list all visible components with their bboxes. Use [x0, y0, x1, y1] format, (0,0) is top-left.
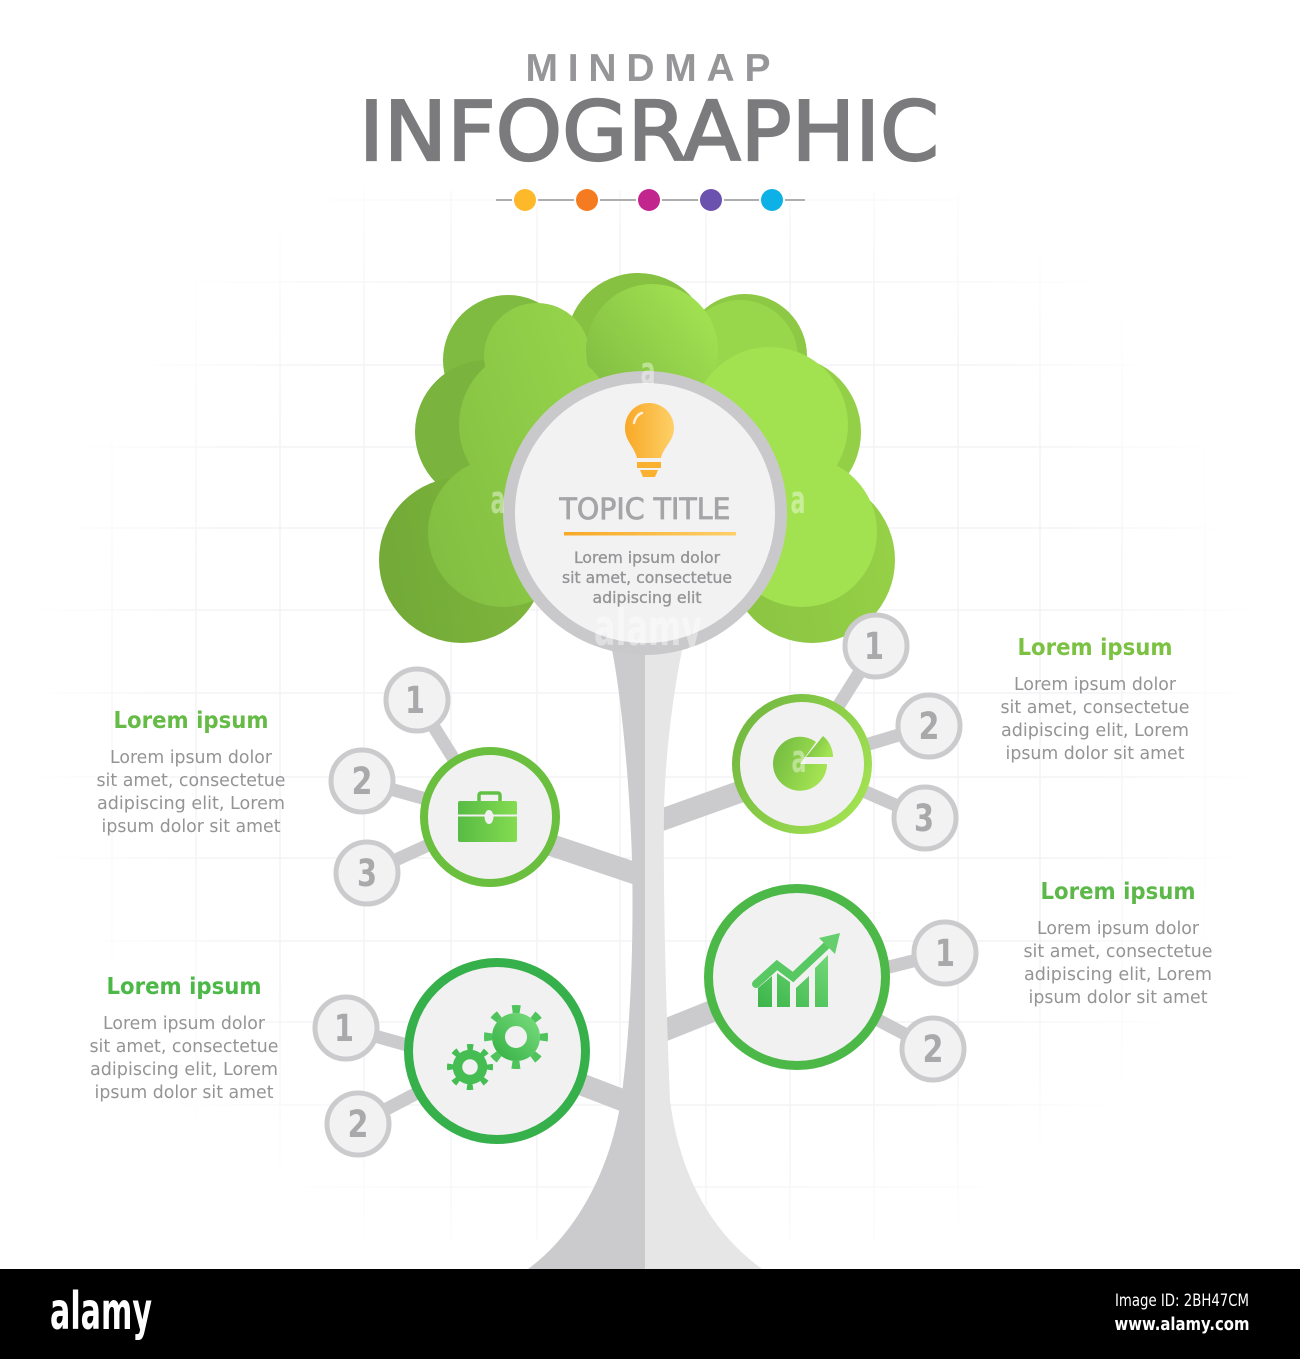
number 1 — [914, 922, 976, 984]
watermarks: a — [792, 737, 806, 781]
number 3: 3 — [914, 797, 934, 840]
number 1: 1 — [935, 932, 955, 975]
number 1: 1 — [864, 625, 884, 668]
topic description — [562, 548, 732, 607]
number 1 — [315, 997, 377, 1059]
watermarks: a — [790, 478, 806, 522]
watermarks: a — [640, 349, 656, 393]
icon: briefcase — [458, 793, 517, 842]
number 2 — [902, 1018, 964, 1080]
text block: upper left: Lorem ipsum dolor — [110, 747, 273, 768]
text block: upper left: Lorem ipsum — [114, 708, 268, 734]
number 2: 2 — [918, 705, 940, 748]
text block: upper left — [96, 708, 286, 837]
text block: upper right: Lorem ipsum — [1018, 635, 1172, 661]
number 1: 1 — [405, 679, 425, 722]
number 2: 2 — [922, 1028, 944, 1071]
text block: upper left: adipiscing elit, Lorem — [97, 793, 285, 814]
footer bar — [0, 1269, 1300, 1359]
text block: lower right: sit amet, consectetue — [1024, 941, 1212, 962]
text block: upper right: sit amet, consectetue — [1000, 697, 1190, 718]
panel: gears node — [315, 962, 586, 1155]
number 3 — [336, 842, 398, 904]
text block: lower right: ipsum dolor sit amet — [1028, 987, 1208, 1008]
number 2: 2 — [352, 760, 372, 803]
title: MINDMAP: MINDMAP — [526, 47, 770, 90]
number 1 — [845, 615, 907, 677]
title: INFOGRAPHIC: INFOGRAPHIC — [359, 85, 939, 180]
text block: upper right: Lorem ipsum dolor — [1014, 674, 1177, 695]
website: www.alamy.com — [1114, 1314, 1250, 1335]
topic circle — [509, 377, 781, 649]
footer logo: alamy — [50, 1282, 152, 1342]
topic description: Lorem ipsum dolor — [574, 548, 720, 567]
icon: light bulb — [625, 403, 674, 477]
text block: lower right — [1024, 879, 1212, 1008]
branches — [545, 790, 745, 1105]
text block: upper left: sit amet, consectetue — [96, 770, 286, 791]
number 2 — [898, 695, 960, 757]
icon: gears — [450, 1009, 544, 1087]
topic title: TOPIC TITLE — [559, 492, 730, 526]
number 2: 2 — [348, 1103, 368, 1146]
topic description: sit amet, consectetue — [562, 568, 732, 587]
title underline — [564, 532, 736, 536]
text block: lower left — [90, 974, 278, 1103]
text block: upper left: ipsum dolor sit amet — [102, 816, 280, 837]
tree canopy — [379, 273, 895, 643]
image id: Image ID: 2BH47CM — [1115, 1291, 1249, 1311]
title dots divider — [496, 187, 805, 213]
text block: lower right: Lorem ipsum — [1040, 879, 1196, 905]
number 3: 3 — [357, 852, 377, 895]
number 1: 1 — [334, 1007, 354, 1050]
panel: growth chart node — [708, 888, 976, 1080]
text block: lower left: adipiscing elit, Lorem — [90, 1059, 278, 1080]
number 1 — [386, 669, 448, 731]
text block: upper right: ipsum dolor sit amet — [1006, 743, 1184, 764]
number 3 — [894, 787, 956, 849]
watermarks: alamy — [594, 599, 702, 657]
text block: upper right — [1000, 635, 1190, 764]
watermarks: a — [490, 478, 506, 522]
text block: lower right: Lorem ipsum dolor — [1037, 918, 1200, 939]
panel: briefcase node — [331, 669, 556, 904]
panel: pie chart node — [736, 615, 960, 849]
icon: growth chart — [756, 933, 840, 1007]
tree trunk — [528, 650, 762, 1269]
text block: lower right: adipiscing elit, Lorem — [1024, 964, 1212, 985]
icon: pie chart — [773, 736, 833, 791]
number 2 — [331, 750, 393, 812]
text block: lower left: Lorem ipsum — [106, 974, 262, 1000]
text block: lower left: sit amet, consectetue — [90, 1036, 278, 1057]
text block: upper right: adipiscing elit, Lorem — [1001, 720, 1189, 741]
topic description: adipiscing elit — [592, 588, 702, 607]
watermarks — [490, 349, 806, 781]
text block: lower left: Lorem ipsum dolor — [103, 1013, 266, 1034]
number 2 — [327, 1093, 389, 1155]
text block: lower left: ipsum dolor sit amet — [94, 1082, 274, 1103]
